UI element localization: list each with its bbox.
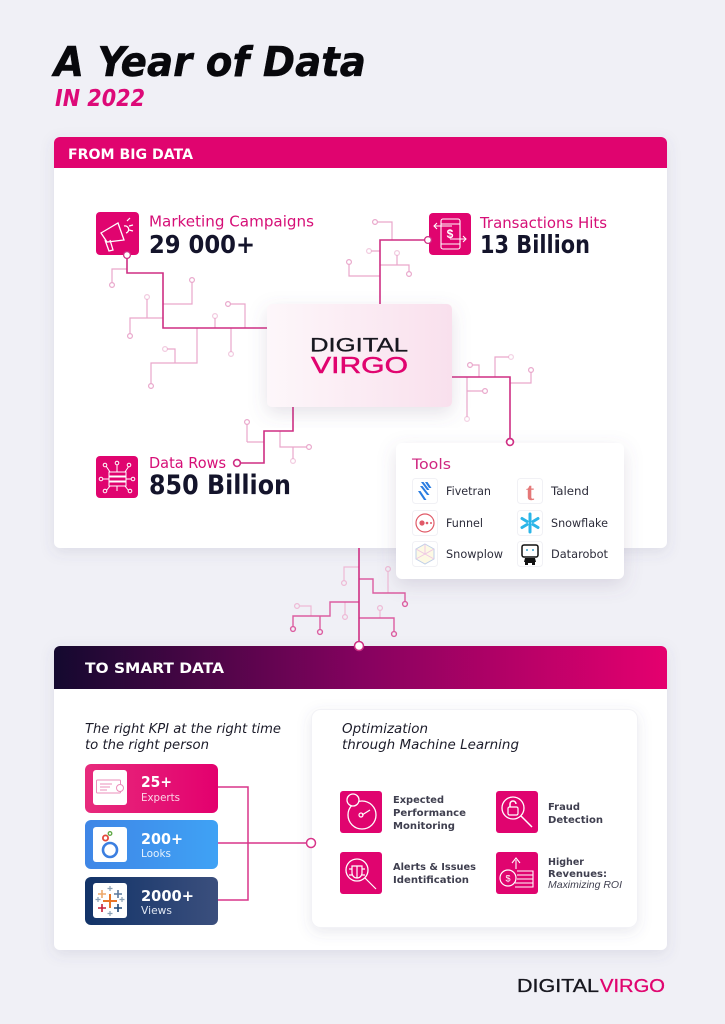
tool: Talend <box>518 478 589 506</box>
KPI bar: experts <box>85 764 218 813</box>
item: alerts and issues identification: Alerts & Issues <box>393 862 476 873</box>
heading: to smart data: TO SMART DATA <box>85 661 224 677</box>
panel: to smart data <box>54 646 667 950</box>
item: alerts and issues identification: Identification <box>393 875 469 886</box>
tool: Funnel <box>412 510 483 536</box>
stat: marketing campaigns <box>96 212 314 259</box>
KPI bar: looks: Looks <box>141 848 171 860</box>
KPI bar: looks <box>85 820 218 869</box>
title <box>51 38 366 112</box>
icon: phone transaction: $ <box>447 227 454 241</box>
item: higher revenues: $ <box>505 874 511 884</box>
stat: data rows: Data Rows <box>149 454 226 472</box>
tool: Snowflake: Snowflake <box>551 516 608 530</box>
item: fraud detection: Detection <box>548 815 603 826</box>
icon: data server <box>96 456 138 498</box>
item: fraud detection: Fraud <box>548 802 580 813</box>
footer logo: VIRGO <box>600 976 665 996</box>
title: A Year of Data <box>51 38 366 86</box>
center logo card: VIRGO <box>311 352 408 378</box>
heading: from big data <box>54 137 667 168</box>
heading: optimization: Optimization <box>342 722 428 737</box>
heading: to smart data <box>54 646 667 689</box>
text: KPI statement <box>85 722 281 753</box>
panel: from big data <box>54 137 667 548</box>
item: expected performance monitoring <box>340 791 466 833</box>
stat: transactions hits <box>425 213 607 259</box>
circuit: main trunks, big data <box>127 240 513 466</box>
center logo card: DIGITAL <box>310 336 408 356</box>
tool: Snowplow: Snowplow <box>446 547 503 561</box>
icon: phone transaction <box>425 213 471 255</box>
stat: data rows: 850 Billion <box>149 470 291 501</box>
item: expected performance monitoring: Performance <box>393 808 466 819</box>
tool: Fivetran <box>412 478 491 504</box>
heading: optimization: through Machine Learning <box>342 738 519 753</box>
stat: transactions hits: Transactions Hits <box>479 214 607 232</box>
heading: optimization <box>342 722 519 753</box>
text: KPI statement: to the right person <box>85 738 209 753</box>
tool: Talend: Talend <box>550 484 589 498</box>
stat: marketing campaigns: 29 000+ <box>149 230 255 259</box>
tool: Datarobot <box>518 542 608 566</box>
heading: from big data: FROM BIG DATA <box>68 147 193 163</box>
KPI bar: experts: 25+ <box>141 773 172 791</box>
item: expected performance monitoring: Expected <box>393 795 444 806</box>
panel: tools <box>396 439 624 579</box>
circuit: connector between panels <box>291 548 407 642</box>
tool: Datarobot: Datarobot <box>551 547 608 561</box>
text: KPI statement: The right KPI at the right time <box>85 722 281 737</box>
title: IN 2022 <box>55 86 145 112</box>
item: expected performance monitoring: Monitoring <box>393 821 455 832</box>
tool: Funnel: Funnel <box>446 516 483 530</box>
item: higher revenues: Revenues: <box>548 869 607 880</box>
KPI bar: views: 2000+ <box>141 887 194 905</box>
KPI bar: experts: Experts <box>141 792 180 804</box>
tool: Snowplow <box>412 542 503 566</box>
item: higher revenues: Higher <box>548 857 584 868</box>
tool: Fivetran: Fivetran <box>446 484 491 498</box>
KPI bar: looks: 200+ <box>141 830 183 848</box>
footer logo <box>517 976 665 996</box>
panel: tools: Tools <box>411 457 451 473</box>
stat: data rows <box>96 454 291 501</box>
KPI bar: views <box>85 877 218 925</box>
item: higher revenues: Maximizing ROI <box>548 879 622 891</box>
tool: Snowflake <box>518 510 608 536</box>
circuit: light branches, big data <box>110 220 533 463</box>
center logo card <box>267 304 452 407</box>
item: fraud detection <box>496 791 603 833</box>
item: alerts and issues identification <box>340 852 476 894</box>
panel: optimization <box>306 710 638 928</box>
KPI bar: views: Views <box>141 905 172 917</box>
tool: Talend: t <box>526 479 535 506</box>
stat: transactions hits: 13 Billion <box>480 230 590 259</box>
stat: marketing campaigns: Marketing Campaigns <box>149 212 314 230</box>
item: higher revenues <box>496 852 622 894</box>
icon: megaphone <box>96 212 139 258</box>
footer logo: DIGITAL <box>517 976 599 996</box>
connector lines: KPI to optimization <box>218 787 306 900</box>
